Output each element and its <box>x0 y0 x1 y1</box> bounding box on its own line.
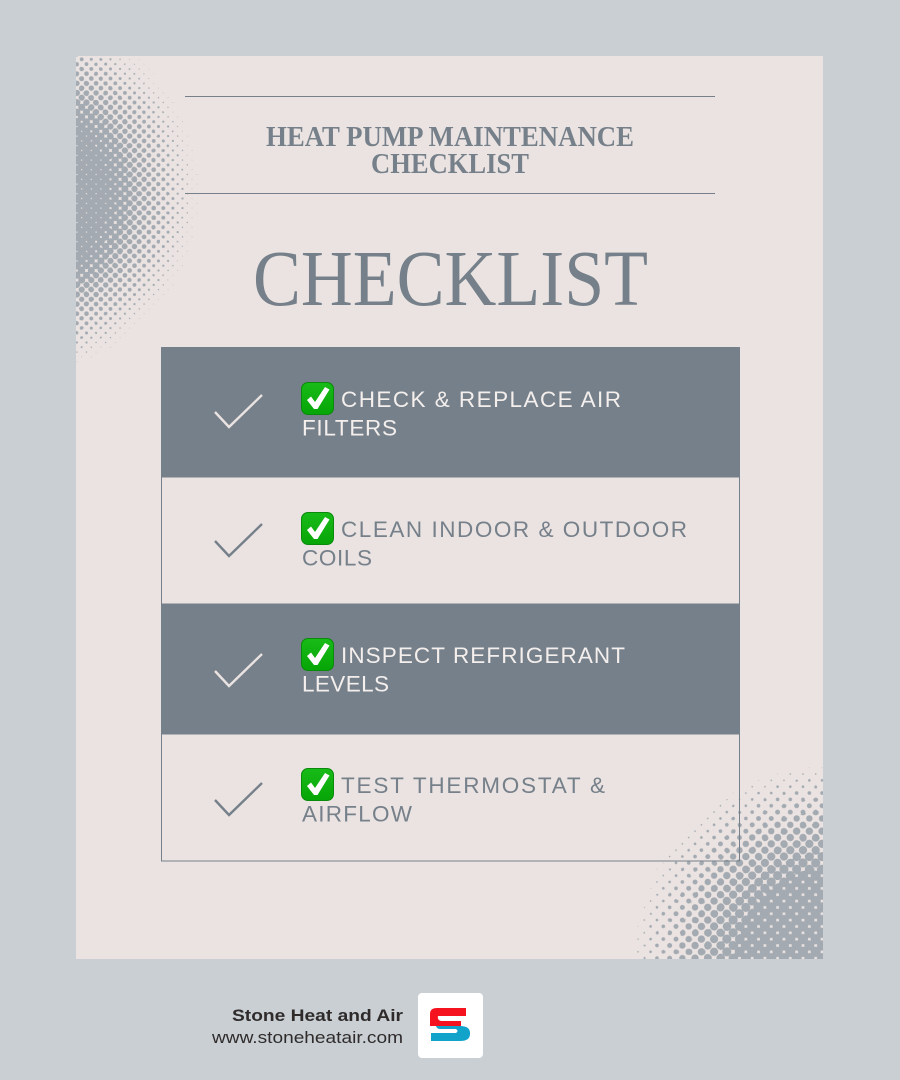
row 4: test thermostat and airflow: AIRFLOW <box>302 802 413 826</box>
row 2: clean indoor and outdoor coils: CLEAN INDOOR & OUTDOOR <box>341 517 687 542</box>
title <box>266 121 634 180</box>
row 2: clean indoor and outdoor coils: COILS <box>302 546 372 570</box>
halftone decoration: bottom right <box>632 765 823 959</box>
title: CHECKLIST <box>371 148 529 180</box>
heading: checklist: CHECKLIST <box>253 236 648 323</box>
row 3: inspect refrigerant levels <box>161 604 740 734</box>
row 4: test thermostat and airflow <box>162 734 740 861</box>
row 4: test thermostat and airflow: TEST THERMOSTAT & <box>341 773 605 798</box>
row 2: clean indoor and outdoor coils <box>162 477 740 604</box>
title: HEAT PUMP MAINTENANCE <box>266 121 634 153</box>
row 3: inspect refrigerant levels: INSPECT REFRIGERANT <box>341 643 625 668</box>
row 3: inspect refrigerant levels: LEVELS <box>302 672 389 696</box>
panel: checklist card <box>76 56 823 959</box>
row 1: check and replace air filters: FILTERS <box>302 416 397 440</box>
halftone decoration: top left <box>76 56 198 362</box>
row 1: check and replace air filters <box>161 347 740 477</box>
checklist table <box>161 347 740 861</box>
footer brand text: www.stoneheatair.com <box>211 1028 403 1047</box>
footer brand text <box>211 1006 403 1047</box>
row 1: check and replace air filters: CHECK & REPLACE AIR <box>341 387 621 412</box>
icon: company logo <box>418 993 483 1058</box>
footer brand text: Stone Heat and Air <box>232 1006 403 1025</box>
